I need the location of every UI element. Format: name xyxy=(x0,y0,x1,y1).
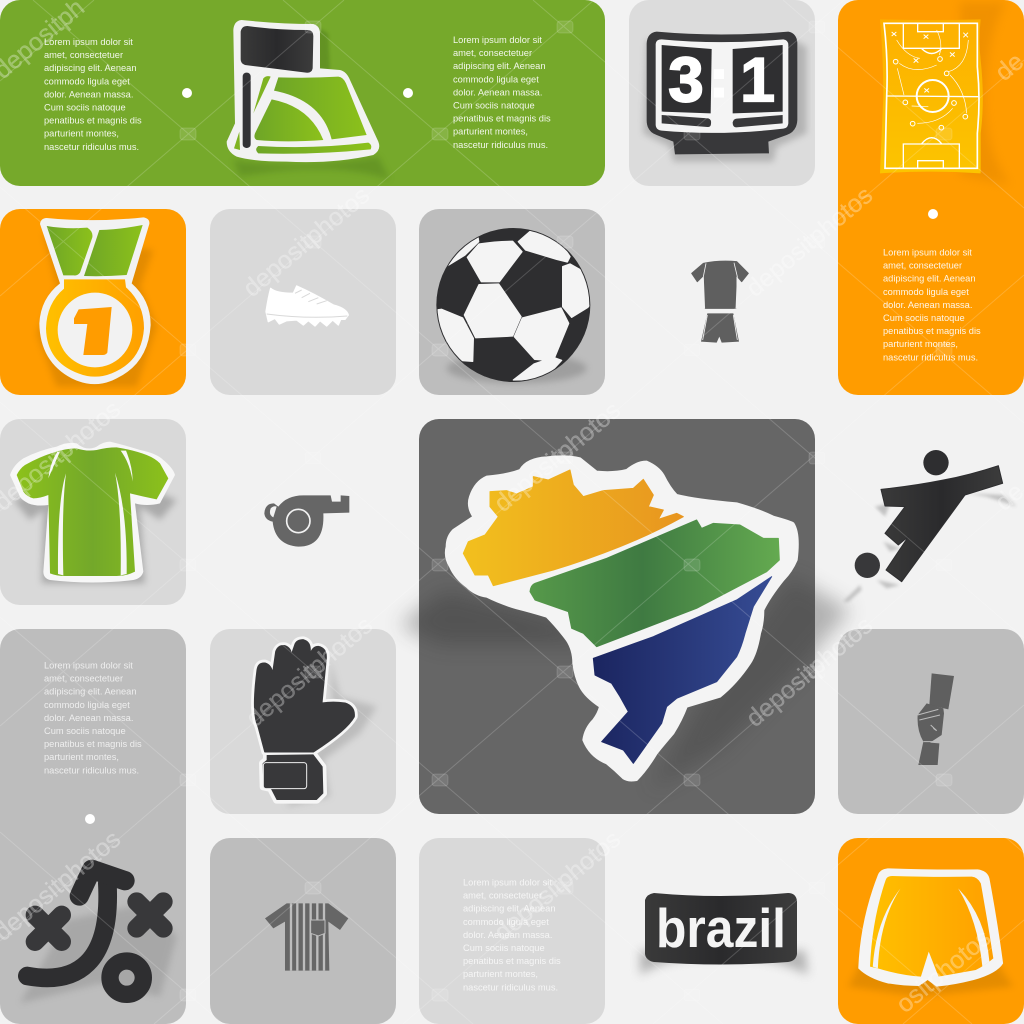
text block: green left: amet, consectetuer xyxy=(44,50,123,60)
panel: shirt xyxy=(0,419,186,605)
score text: : xyxy=(711,51,727,107)
text block: green left: adipiscing elit. Aenean xyxy=(44,63,137,73)
panel: light text card xyxy=(419,838,605,1024)
text block: grey: nascetur ridiculus mus. xyxy=(44,765,139,775)
panel: glove xyxy=(210,629,396,814)
watermark text: depositphotos xyxy=(489,825,626,947)
icon: corner flag xyxy=(227,20,390,180)
text block: grey: Lorem ipsum dolor sit xyxy=(44,660,133,670)
text block: light: adipiscing elit. Aenean xyxy=(463,904,556,914)
icon: goalkeeper glove xyxy=(255,640,377,807)
text block: green right: dolor. Aenean massa. xyxy=(453,87,542,97)
text block: grey: dolor. Aenean massa. xyxy=(44,713,133,723)
icon: gold medal xyxy=(37,217,157,387)
text block: light: nascetur ridiculus mus. xyxy=(463,982,558,992)
text block: green right: nascetur ridiculus mus. xyxy=(453,140,548,150)
text block: light: penatibus et magnis dis xyxy=(463,956,561,966)
watermark text: depositphotos xyxy=(741,181,878,303)
text block: orange: penatibus et magnis dis xyxy=(883,326,981,336)
text block: orange: Lorem ipsum dolor sit xyxy=(883,248,972,258)
text block: orange: commodo ligula eget xyxy=(883,287,969,297)
icon: hand holding card xyxy=(918,673,954,765)
panel: brazil map xyxy=(400,419,850,814)
text block: light: Cum sociis natoque xyxy=(463,943,545,953)
text block: orange: parturient montes, xyxy=(883,339,958,349)
panel: ball xyxy=(419,209,605,395)
text block: grey: adipiscing elit. Aenean xyxy=(44,687,137,697)
text block: green left: Cum sociis natoque xyxy=(44,102,126,112)
icon: tactics pitch xyxy=(880,19,983,173)
icon: orange shorts xyxy=(848,868,1013,997)
text block: grey: parturient montes, xyxy=(44,752,119,762)
icon: kit shirt and shorts xyxy=(692,261,748,343)
icon: football boot xyxy=(266,286,348,326)
score text: 3 xyxy=(668,45,704,115)
text block: orange: nascetur ridiculus mus. xyxy=(883,352,978,362)
text block: green right: adipiscing elit. Aenean xyxy=(453,61,546,71)
icon: soccer ball xyxy=(430,228,597,383)
panel: medal xyxy=(0,209,186,395)
text block: green right: Cum sociis natoque xyxy=(453,100,535,110)
watermark text: depositphotos xyxy=(241,611,378,733)
text block: green right: penatibus et magnis dis xyxy=(453,114,551,124)
text block: orange: dolor. Aenean massa. xyxy=(883,300,972,310)
watermark camera marks xyxy=(180,21,952,1001)
panel: scoreboard xyxy=(629,0,815,186)
panel: orange tactics board xyxy=(838,0,1024,395)
brazil wordmark: brazil xyxy=(656,897,786,959)
icon: green shirt xyxy=(10,442,177,583)
text block: grey: Cum sociis natoque xyxy=(44,726,126,736)
shadow: pitch cast xyxy=(960,2,1010,185)
shadow: left cast xyxy=(400,590,590,645)
text block: green right: amet, consectetuer xyxy=(453,48,532,58)
text block: green left: penatibus et magnis dis xyxy=(44,116,142,126)
text block: light: amet, consectetuer xyxy=(463,891,542,901)
score text: 1 xyxy=(740,45,775,115)
panel: green banner xyxy=(0,0,605,186)
icon: play diagram xyxy=(20,869,177,1003)
panel: tall grey tactics xyxy=(0,629,186,1024)
text block: orange: amet, consectetuer xyxy=(883,261,962,271)
text block: green right: Lorem ipsum dolor sit xyxy=(453,35,542,45)
text block: green left: Lorem ipsum dolor sit xyxy=(44,37,133,47)
icon: scoreboard 3:1 xyxy=(643,32,807,162)
text block: grey: penatibus et magnis dis xyxy=(44,739,142,749)
watermark text: depositphotos xyxy=(489,396,626,518)
icon: brazil label xyxy=(640,893,808,975)
panel: referee shirt xyxy=(210,838,396,1024)
text block: green right: commodo ligula eget xyxy=(453,74,539,84)
text block: grey: amet, consectetuer xyxy=(44,674,123,684)
watermark text: depositphotos xyxy=(238,181,375,303)
text block: light: Lorem ipsum dolor sit xyxy=(463,878,552,888)
panel: red card xyxy=(838,629,1024,814)
panel: boot xyxy=(210,209,396,395)
text block: light: dolor. Aenean massa. xyxy=(463,930,552,940)
text block: green left: commodo ligula eget xyxy=(44,76,130,86)
watermark text: depositphotos xyxy=(741,611,878,733)
icon: whistle xyxy=(264,495,349,547)
text block: green right: parturient montes, xyxy=(453,127,528,137)
text block: grey: commodo ligula eget xyxy=(44,700,130,710)
icon: brazil map sticker xyxy=(446,456,798,781)
icon: kicking player xyxy=(843,450,1017,602)
text block: light: parturient montes, xyxy=(463,969,538,979)
text block: orange: Cum sociis natoque xyxy=(883,313,965,323)
watermark text: ositphotos xyxy=(891,924,996,1019)
icon: striped referee shirt xyxy=(265,902,348,971)
marker dot left xyxy=(182,88,192,98)
marker dot xyxy=(928,209,938,219)
marker dot right xyxy=(403,88,413,98)
marker dot xyxy=(85,814,95,824)
text block: orange: adipiscing elit. Aenean xyxy=(883,274,976,284)
text block: green left: nascetur ridiculus mus. xyxy=(44,142,139,152)
text block: green left: parturient montes, xyxy=(44,129,119,139)
panel: shorts xyxy=(838,838,1024,1024)
text block: light: commodo ligula eget xyxy=(463,917,549,927)
text block: green left: dolor. Aenean massa. xyxy=(44,89,133,99)
shadow: right cast xyxy=(650,575,850,790)
